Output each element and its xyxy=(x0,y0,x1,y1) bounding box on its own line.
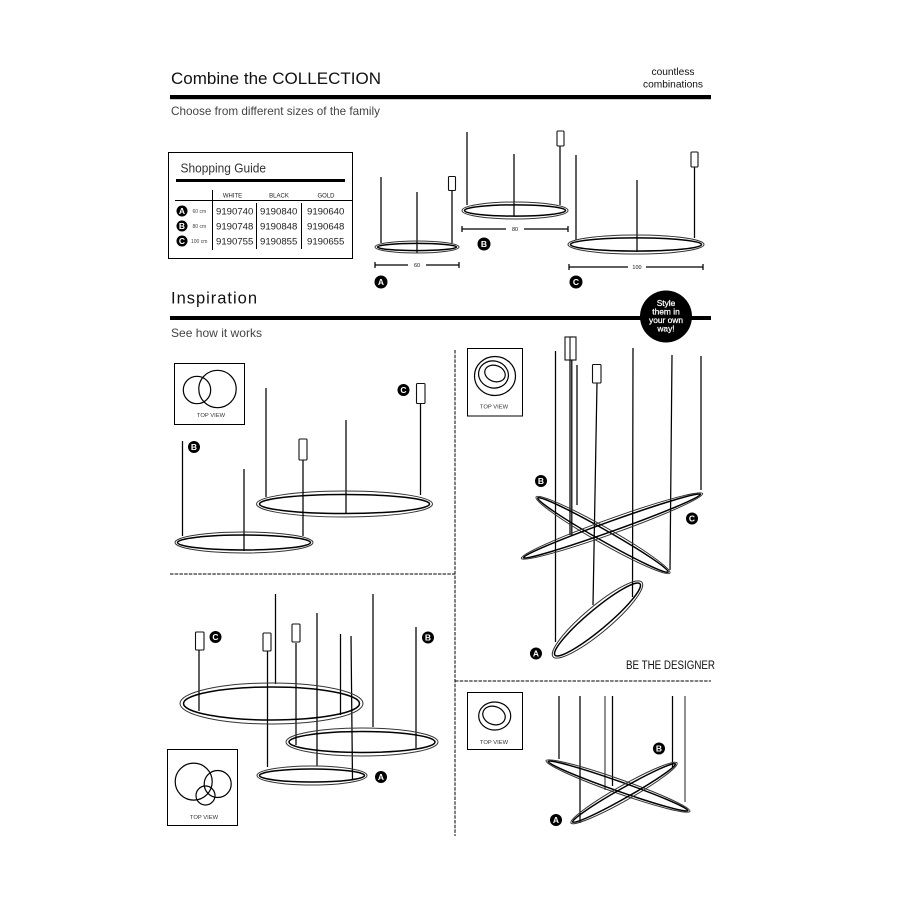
lamp B, 80 cm xyxy=(462,131,568,250)
suspension lines xyxy=(556,348,701,642)
top view box: TOP VIEW xyxy=(480,740,509,746)
row B xyxy=(176,220,344,232)
ring C xyxy=(519,486,705,566)
lamp B, 80 cm: 80 xyxy=(512,227,518,233)
table column headers: WHITE xyxy=(223,194,242,200)
row A: 9190740 xyxy=(216,206,253,218)
lamp A, 60 cm xyxy=(374,176,459,288)
ring C: C xyxy=(400,385,407,395)
row B: 9190648 xyxy=(307,222,344,232)
ring A xyxy=(545,572,650,667)
title: Combine the COLLECTION: Combine the COLLECTION xyxy=(171,69,381,88)
top view box: TOP VIEW xyxy=(190,815,219,821)
row C: 9190655 xyxy=(307,236,344,248)
label C xyxy=(210,631,222,643)
row C: 9190755 xyxy=(216,236,253,248)
canisters xyxy=(565,337,601,383)
suspension lines xyxy=(199,594,416,780)
subtitle: Choose from different sizes of the family xyxy=(171,104,380,118)
badge: Style them in your own way: Style xyxy=(657,298,676,308)
badge: Style them in your own way xyxy=(640,290,692,342)
label B xyxy=(422,632,434,644)
panel: two crossed rings xyxy=(468,692,692,830)
badge: Style them in your own way: them in xyxy=(652,306,680,316)
label A: A xyxy=(553,815,559,825)
row B: 9190748 xyxy=(216,222,253,232)
label B: B xyxy=(425,632,431,642)
label A xyxy=(530,648,542,660)
ring C xyxy=(180,683,363,724)
top view box xyxy=(468,348,522,416)
ring B xyxy=(175,439,313,553)
lamp C, 100 cm: 100 xyxy=(632,265,642,271)
panel: three rings A, B and C xyxy=(168,594,438,826)
label B: B xyxy=(538,476,544,486)
row A: A xyxy=(179,206,185,216)
label B xyxy=(653,742,665,754)
heading: Shopping Guide: Shopping Guide xyxy=(180,162,266,176)
table column headers: BLACK xyxy=(269,194,289,200)
lamp C, 100 cm: C xyxy=(573,277,579,287)
top view box xyxy=(168,750,238,826)
row A: 9190640 xyxy=(307,206,344,218)
subheading: See how it works: See how it works xyxy=(171,326,262,340)
row B: 80 cm xyxy=(192,224,206,230)
row B: 9190848 xyxy=(260,222,297,232)
lamp A, 60 cm: 60 xyxy=(414,263,420,269)
tagline: countless combinations: countless xyxy=(651,67,695,78)
panel: shopping guide xyxy=(168,152,352,258)
row C xyxy=(176,236,344,248)
table column headers xyxy=(223,194,335,200)
row C: C xyxy=(179,236,185,246)
label C: C xyxy=(689,514,695,524)
top view box xyxy=(468,692,522,750)
ring A xyxy=(567,756,681,830)
inspiration rule xyxy=(170,316,711,320)
row C: 100 cm xyxy=(191,239,207,245)
row A: 60 cm xyxy=(192,209,206,215)
lamp B, 80 cm: B xyxy=(481,239,487,249)
canisters xyxy=(196,624,300,651)
ring B xyxy=(532,490,674,580)
label A: A xyxy=(533,648,539,658)
lamp C, 100 cm xyxy=(568,152,704,288)
label A xyxy=(375,771,387,783)
ring B xyxy=(286,728,438,756)
suspension lines xyxy=(559,696,672,823)
badge: Style them in your own way: your own xyxy=(649,315,683,325)
lamp A, 60 cm: A xyxy=(378,277,384,287)
row C: 9190855 xyxy=(260,236,297,248)
label B xyxy=(535,475,547,487)
top view box xyxy=(174,364,244,424)
tagline: countless combinations: combinations xyxy=(643,80,703,90)
ring A xyxy=(257,766,367,785)
top view box: TOP VIEW xyxy=(480,404,509,410)
label A xyxy=(550,814,562,826)
table column headers: GOLD xyxy=(317,194,335,200)
heading: Inspiration: Inspiration xyxy=(171,290,257,308)
top view box: TOP VIEW xyxy=(197,413,226,419)
ring B: B xyxy=(191,442,197,452)
tagline: countless combinations xyxy=(643,67,703,90)
panel: two rings B and C xyxy=(174,364,432,553)
badge: Style them in your own way: way! xyxy=(656,324,675,334)
caption: BE THE DESIGNER: BE THE DESIGNER xyxy=(626,660,715,672)
label C xyxy=(686,512,698,524)
label B: B xyxy=(656,744,662,754)
header rule xyxy=(170,95,711,99)
label C: C xyxy=(212,632,219,642)
ring C xyxy=(256,384,432,517)
panel: tilted rings, be the designer xyxy=(468,337,715,672)
row A xyxy=(176,206,344,218)
row B: B xyxy=(179,221,185,231)
row A: 9190840 xyxy=(260,206,297,218)
ring B xyxy=(544,754,692,818)
label A: A xyxy=(378,772,384,782)
